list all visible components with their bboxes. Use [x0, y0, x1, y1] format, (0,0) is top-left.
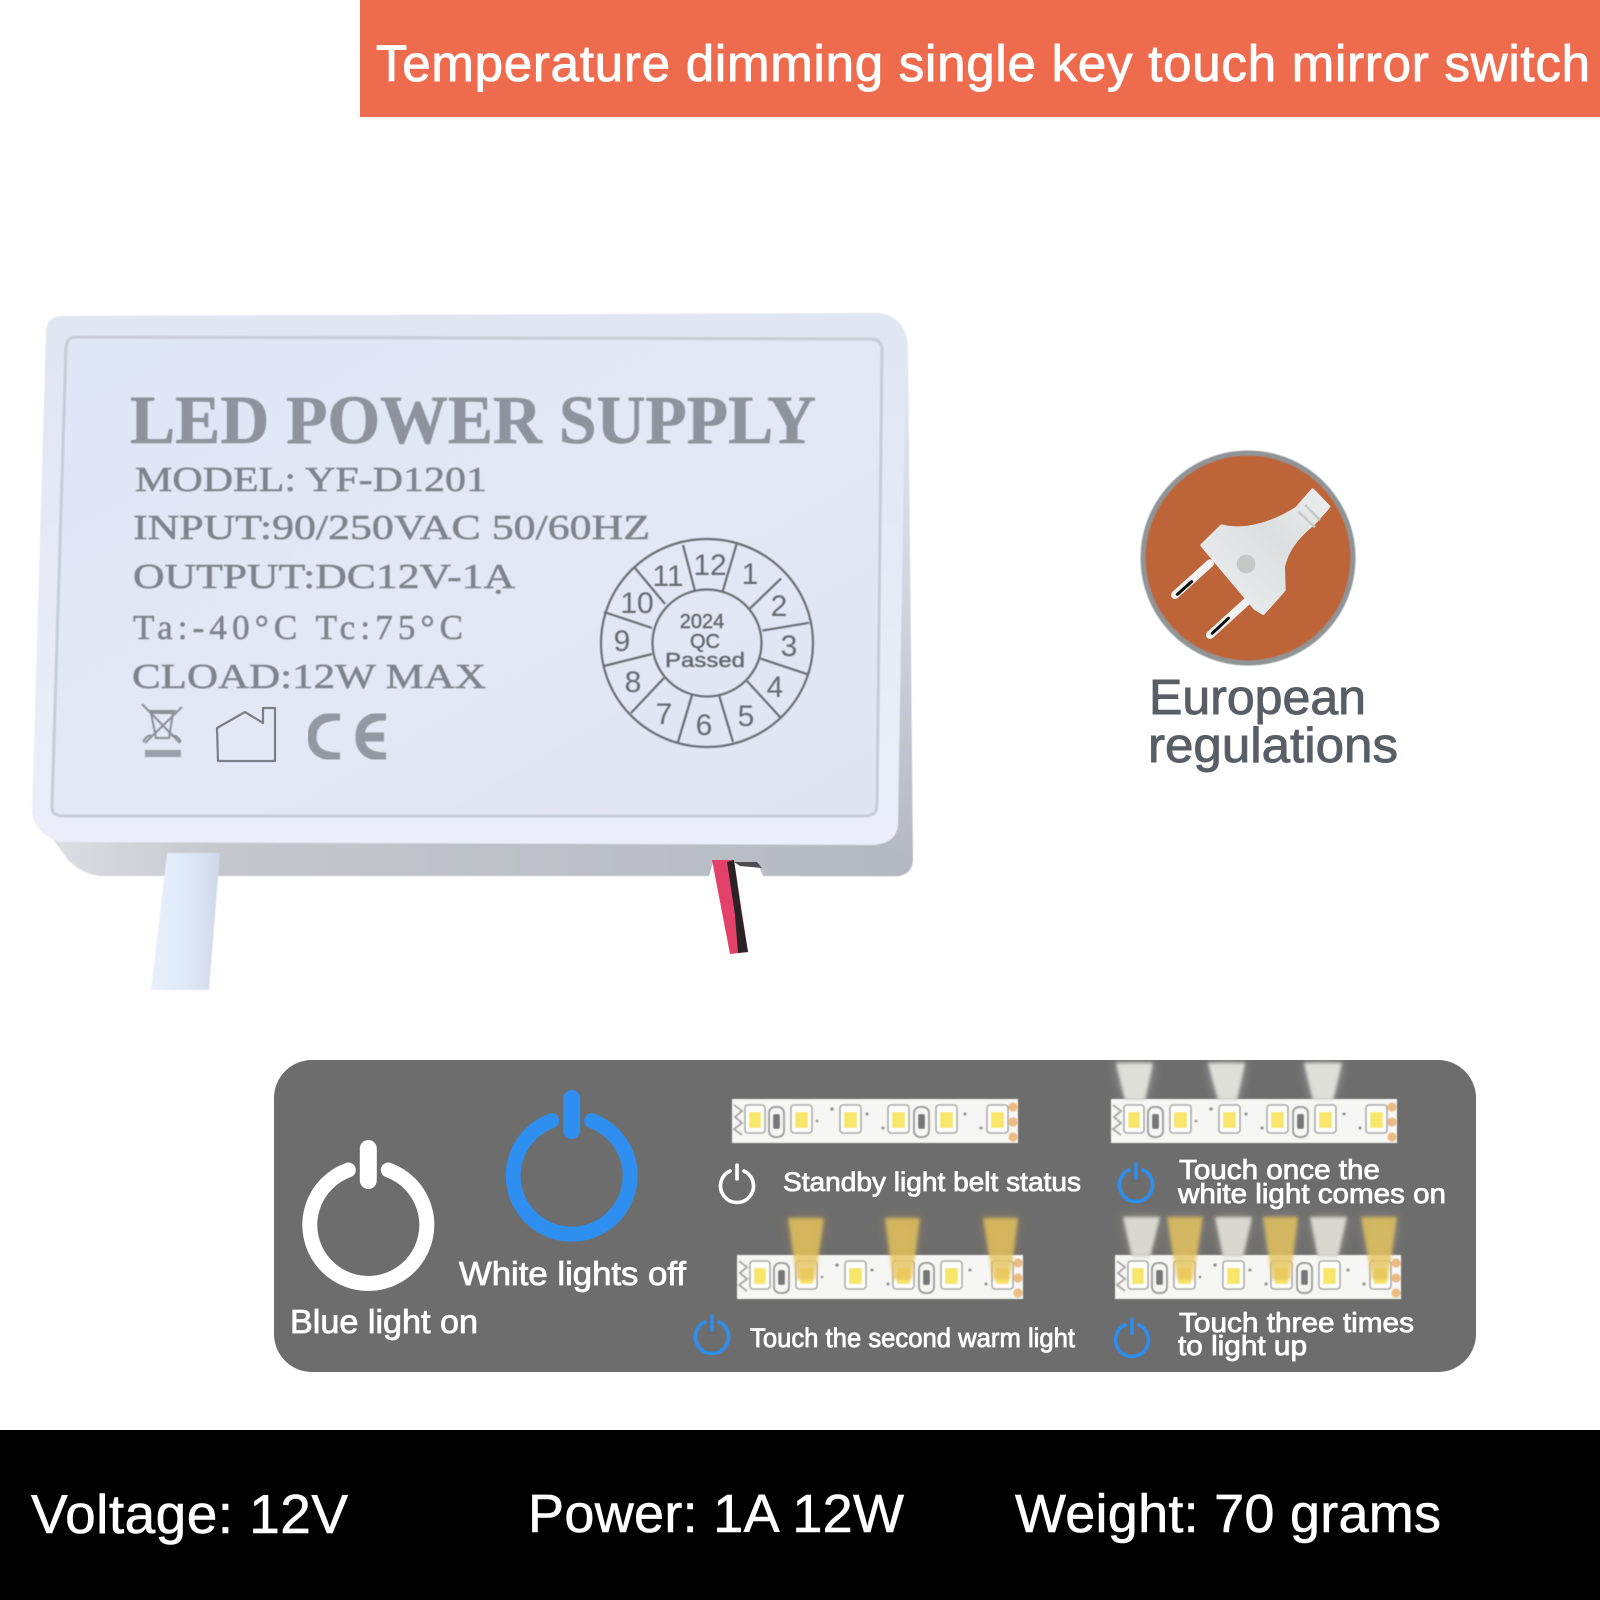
mode: touch once, white: white light comes on — [1177, 1178, 1446, 1209]
QC date seal — [601, 539, 813, 747]
spec lines — [132, 460, 650, 696]
icon: WEEE crossed bin — [142, 704, 182, 757]
spec lines: OUTPUT:DC12V-1Ạ — [133, 557, 516, 596]
box underside band — [50, 835, 900, 876]
mode: touch once, white — [1111, 1063, 1446, 1209]
QC date seal: 7 — [656, 698, 672, 731]
box side — [800, 316, 913, 876]
mode: standby: Standby light belt status — [783, 1167, 1081, 1197]
caption: European — [1149, 671, 1366, 725]
QC date seal: 4 — [767, 671, 783, 704]
title banner — [360, 0, 1600, 117]
QC date seal: 9 — [614, 625, 630, 658]
box front face — [32, 313, 906, 845]
badge: European plug — [1143, 453, 1398, 773]
caption: regulations — [1148, 719, 1398, 773]
icon: house — [217, 708, 275, 761]
panel: touch control modes — [274, 1060, 1476, 1372]
label: blue light on: Blue light on — [290, 1303, 478, 1340]
spec bar — [0, 1430, 1600, 1600]
printed label text — [130, 382, 816, 696]
mode: standby — [720, 1099, 1081, 1202]
icon: plug — [1175, 490, 1329, 635]
spec lines: CLOAD:12W MAX — [132, 657, 486, 696]
icon: blue power button — [513, 1098, 630, 1234]
title banner: Temperature dimming single key touch mirror switch — [376, 35, 1590, 92]
QC date seal: 11 — [652, 560, 684, 593]
spec: voltage: Voltage: 12V — [31, 1483, 348, 1545]
label: white lights off: White lights off — [459, 1255, 687, 1292]
mode: three touches, white and warm: Touch three times — [1179, 1307, 1414, 1338]
QC date seal: 12 — [693, 549, 727, 582]
product: LED power supply box — [32, 313, 913, 990]
QC date seal: 5 — [738, 700, 754, 733]
QC date seal: 8 — [625, 666, 641, 699]
icon: CE mark — [312, 716, 386, 757]
spec lines: Ta:-40°C Tc:75°C — [133, 608, 463, 647]
QC date seal: 2024 — [680, 611, 724, 633]
mode: second touch, warm: Touch the second warm light — [750, 1323, 1075, 1353]
badge circle — [1143, 453, 1353, 663]
QC date seal: 6 — [696, 709, 712, 742]
QC date seal: Passed — [665, 650, 745, 672]
QC date seal: 2 — [771, 590, 787, 623]
red and black wires — [712, 860, 748, 954]
panel background — [274, 1060, 1476, 1372]
caption — [1148, 671, 1398, 773]
wire slot — [708, 862, 765, 880]
mode: second touch, warm — [696, 1218, 1075, 1353]
spec lines: MODEL: YF-D1201 — [135, 460, 487, 499]
spec lines: INPUT:90/250VAC 50/60HZ — [133, 508, 650, 547]
mode: three touches, white and warm: to light up — [1178, 1330, 1307, 1361]
cable — [151, 853, 220, 990]
heading: LED POWER SUPPLY — [130, 382, 816, 458]
inner panel outline — [52, 337, 882, 816]
icon: white power button — [310, 1148, 427, 1283]
QC date seal: 1 — [742, 558, 758, 591]
QC date seal: QC — [690, 631, 720, 653]
spec: power: Power: 1A 12W — [528, 1484, 904, 1544]
wire slot shadow — [734, 862, 762, 868]
QC date seal: 10 — [620, 587, 654, 620]
mode: touch once, white: Touch once the — [1179, 1154, 1380, 1185]
mode: three touches, white and warm — [1115, 1217, 1414, 1361]
spec: weight: Weight: 70 grams — [1015, 1484, 1441, 1544]
QC date seal: 3 — [781, 630, 797, 663]
